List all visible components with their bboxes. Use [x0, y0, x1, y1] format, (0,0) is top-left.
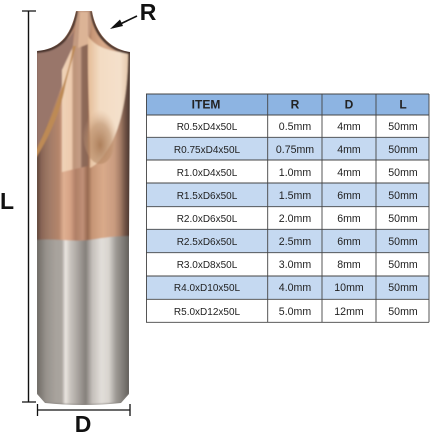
flute shadow [84, 112, 116, 164]
row shading [146, 137, 429, 299]
row R0.5: 50mm [388, 121, 418, 133]
row R1.5: 50mm [388, 190, 418, 202]
row R4.0: R4.0xD10x50L [174, 283, 241, 294]
row R2.5: 6mm [337, 236, 361, 248]
row R2.5 [177, 236, 418, 248]
row R3.0: 50mm [388, 259, 418, 271]
row R1.0: 1.0mm [279, 167, 311, 179]
centre flute land [62, 34, 88, 172]
row R0.5: 4mm [337, 121, 361, 133]
helical gold flute [36, 46, 76, 158]
left relief [37, 30, 74, 150]
icon: end mill cutter [36, 10, 131, 406]
row R5.0: 5.0mm [279, 306, 311, 318]
row R1.0: R1.0xD4x50L [177, 168, 238, 179]
row R0.5: R0.5xD4x50L [177, 122, 238, 133]
copper coated section [36, 10, 131, 242]
row R1.5 [177, 190, 418, 202]
row R2.5: R2.5xD6x50L [177, 237, 238, 248]
row R3.0: 8mm [337, 259, 361, 271]
row R3.0: R3.0xD8x50L [177, 260, 238, 271]
row R2.5: 50mm [388, 236, 418, 248]
row R5.0: R5.0xD12x50L [174, 307, 241, 318]
row R1.0: 4mm [337, 167, 361, 179]
right flute highlight [88, 36, 128, 168]
row R2.0 [177, 213, 418, 225]
table header: L [399, 98, 407, 112]
callout: R radius arrow [110, 0, 157, 29]
row R0.75: R0.75xD4x50L [174, 145, 241, 156]
row R3.0: 3.0mm [279, 259, 311, 271]
dimension: L: L [0, 188, 14, 214]
dimension: L [0, 11, 36, 402]
table header: ITEM [192, 98, 220, 112]
row R0.5: 0.5mm [279, 121, 311, 133]
row R5.0 [174, 306, 418, 318]
row R0.75 [174, 144, 418, 156]
row R4.0 [174, 282, 418, 294]
row R4.0: 10mm [334, 282, 364, 294]
table header [146, 94, 429, 115]
row R0.5 [177, 121, 418, 133]
row R2.0: 50mm [388, 213, 418, 225]
bottom chamfer [37, 393, 129, 405]
row R1.5: R1.5xD6x50L [177, 191, 238, 202]
row R2.0: 2.0mm [279, 213, 311, 225]
row R2.0: R2.0xD6x50L [177, 214, 238, 225]
row R0.75: 0.75mm [276, 144, 314, 156]
neck shadow edge [37, 11, 130, 54]
row R1.5: 6mm [337, 190, 361, 202]
neck [74, 11, 92, 44]
row R1.0: 50mm [388, 167, 418, 179]
row R0.75: 4mm [337, 144, 361, 156]
table header: D [345, 98, 354, 112]
row R4.0: 50mm [388, 282, 418, 294]
row R5.0: 50mm [388, 306, 418, 318]
row R3.0 [177, 259, 418, 271]
table header: R [291, 98, 300, 112]
row R1.0 [177, 167, 418, 179]
row R1.5: 1.5mm [279, 190, 311, 202]
dimension: D [38, 404, 130, 434]
row R4.0: 4.0mm [279, 282, 311, 294]
grid lines [146, 94, 429, 322]
row R0.75: 50mm [388, 144, 418, 156]
steel shank [36, 236, 130, 406]
row R5.0: 12mm [334, 306, 364, 318]
table: specifications [146, 94, 429, 322]
row R2.5: 2.5mm [279, 236, 311, 248]
row R2.0: 6mm [337, 213, 361, 225]
